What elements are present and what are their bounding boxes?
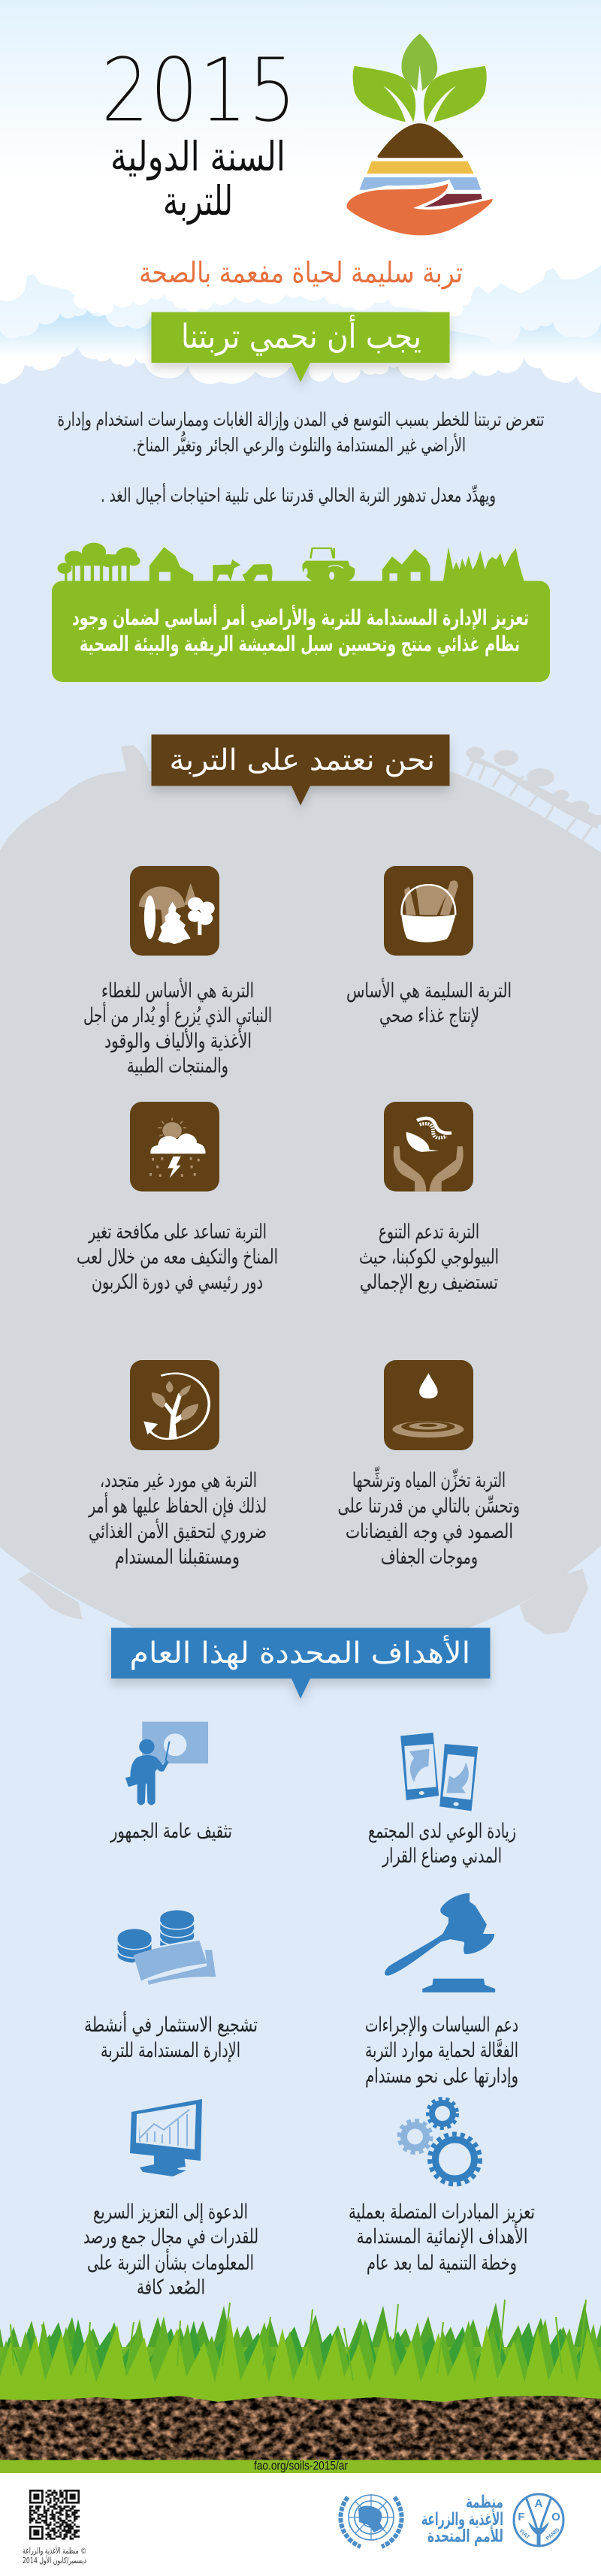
text: raise awareness: المدني وصناع القرار [382, 1845, 502, 1868]
icon: UN emblem [340, 2495, 402, 2547]
text: raise awareness: زيادة الوعي لدى المجتمع [368, 1820, 516, 1843]
icon: trees [130, 866, 219, 955]
text: strengthen initiatives [349, 2200, 535, 2275]
text: raise awareness [368, 1820, 516, 1868]
grass [0, 2300, 601, 2403]
text: support policies [365, 2013, 518, 2088]
text: strengthen initiatives: وخطة التنمية لما بعد عام [367, 2252, 517, 2275]
text: rapid capacity enhancement [83, 2200, 258, 2300]
soil layer [0, 2396, 601, 2460]
text: encourage investment: الإدارة المستدامة للتربة [101, 2039, 240, 2062]
text: soils store and filter water: وتحسِّن بالتالي من قدرتنا على [338, 1495, 520, 1518]
text: soils support biodiversity: البيولوجي لكوكبنا، حيث [359, 1245, 499, 1269]
background sky [0, 0, 601, 180]
icon: gavel [385, 1893, 495, 1992]
icon: water drop [384, 1360, 473, 1450]
title: international year of soils: السنة الدولية [110, 133, 285, 180]
icon: plant cycle [130, 1360, 219, 1450]
text: strengthen initiatives: تعزيز المبادرات المتصلة بعملية [349, 2200, 535, 2224]
icon: QR code [29, 2490, 80, 2538]
text: soils are the foundation for vegetation [83, 977, 272, 1078]
text: soils are the foundation for vegetation: والمنتجات الطبية [127, 1054, 228, 1078]
text: soils store and filter water [338, 1465, 520, 1569]
icon: food basket [384, 866, 473, 955]
panel: grey hill [0, 745, 601, 1664]
title: 2015: 2015 [101, 38, 297, 142]
icon: coins and banknotes [118, 1911, 216, 1985]
callout: sustainable management message [52, 581, 550, 682]
icon: monitor with chart [130, 2099, 202, 2176]
text: healthy soils for food: التربة السليمة هي الأساس [346, 977, 512, 1003]
text: copyright [23, 2545, 86, 2565]
text: FAO name [421, 2493, 503, 2546]
text: healthy soils for food [346, 977, 512, 1027]
text block: threats to soil: الأراضي غير المستدامة والتلوث والرعي الجائر وتغيُّر المناخ. [132, 430, 466, 457]
text: soils are a non-renewable resource: ومستقبلنا المستدام [115, 1546, 240, 1569]
title: international year of soils [110, 133, 285, 225]
heading: we depend on soil [152, 734, 449, 805]
text: encourage investment: تشجيع الاستثمار في أنشطة [84, 2010, 258, 2037]
text: soils are the foundation for vegetation: الأغذية والألياف والوقود [104, 1027, 252, 1053]
icon: FAO emblem: PANIS [545, 2527, 561, 2541]
heading: we depend on soil: نحن نعتمد على التربة [170, 744, 435, 777]
heading: we must protect our soil [152, 312, 449, 382]
icon: phones [400, 1733, 478, 1811]
footer white panel [0, 2473, 601, 2576]
icon: FAO emblem [514, 2494, 563, 2546]
text: encourage investment [84, 2010, 258, 2062]
text: soils store and filter water: التربة تخزِّن المياه وترشِّحها [352, 1465, 506, 1492]
heading: specific objectives: الأهداف المحددة لهذا العام [129, 1634, 470, 1670]
icon: weather [130, 1102, 219, 1191]
icon: FAO emblem: F [518, 2511, 525, 2523]
heading: we must protect our soil: يجب أن نحمي تربتنا [181, 315, 421, 356]
heading: specific objectives [111, 1628, 490, 1699]
text: soils help combat climate change [77, 1220, 278, 1294]
farm silhouette [57, 543, 524, 581]
text: FAO name: للأمم المتحدة [427, 2525, 503, 2546]
icon: gears [399, 2098, 480, 2184]
text: soils help combat climate change: التربة تساعد على مكافحة تغير [88, 1220, 267, 1244]
text: FAO name: منظمة [466, 2493, 503, 2512]
footer band with url: fao.org/soils-2015/ar [254, 2459, 348, 2472]
icon: teacher at board [125, 1722, 208, 1805]
footer band with url [0, 2459, 601, 2473]
text: support policies: دعم السياسات والإجراءات [365, 2013, 518, 2037]
text: copyright: © منظمة الأغذية والزراعة [23, 2545, 86, 2556]
text: soils are a non-renewable resource [88, 1469, 267, 1569]
text: soils support biodiversity: التربة تدعم التنوع [379, 1220, 479, 1244]
text: healthy soils for food: لإنتاج غذاء صحي [379, 1004, 479, 1027]
icon: biodiversity hands [384, 1102, 473, 1192]
text: soils are a non-renewable resource: التربة هي مورد غير متجدد، [100, 1469, 257, 1492]
text: soils are the foundation for vegetation: التربة هي الأساس للغطاء [101, 977, 254, 1003]
icon: FAO emblem: FIAT [518, 2529, 531, 2541]
text: soils support biodiversity [359, 1220, 499, 1294]
text: copyright: ديسمبر/كانون الأول 2014 [23, 2555, 86, 2565]
text: rapid capacity enhancement: المعلومات بشأن التربة على [87, 2248, 254, 2275]
text block: threats to soil [57, 409, 545, 507]
text: strengthen initiatives: الأهداف الإنمائية المستدامة [356, 2223, 527, 2249]
text: soils store and filter water: وموجات الجفاف [381, 1546, 478, 1569]
logo: plant, soil layers and hand [347, 34, 493, 235]
text: rapid capacity enhancement: الصُعد كافة [137, 2276, 205, 2300]
text: soils store and filter water: الصمود في وجه الفيضانات [346, 1520, 513, 1543]
text: soils are a non-renewable resource: لذلك فإن الحفاظ عليها هو أمر [88, 1492, 267, 1518]
text: rapid capacity enhancement: الدعوة إلى التعزيز السريع [93, 2200, 248, 2224]
text: soils are the foundation for vegetation: النباتي الذي يُزرع أو يُدار من أجل [83, 1001, 272, 1027]
text: FAO name: الأغذية والزراعة [421, 2508, 503, 2529]
icon: FAO emblem: A [535, 2497, 543, 2510]
text: soils are a non-renewable resource: ضروري لتحقيق الأمن الغذائي [89, 1518, 267, 1543]
text: support policies: وإدارتها على نحو مستدام [365, 2065, 518, 2088]
text: support policies: الفعَّالة لحماية موارد التربة [365, 2038, 518, 2062]
title: international year of soils: للتربة [163, 177, 233, 225]
text: soils help combat climate change: المناخ والتكيف معه من خلال لعب [77, 1245, 278, 1269]
text: soils help combat climate change: دور رئيسي في دورة الكربون [92, 1271, 263, 1294]
text: educate the public: تثقيف عامة الجمهور [110, 1820, 232, 1843]
subtitle: تربة سليمة لحياة مفعمة بالصحة [139, 256, 463, 290]
text: soils support biodiversity: تستضيف ربع الإجمالي [360, 1271, 498, 1294]
text: rapid capacity enhancement: للقدرات في مجال جمع ورصد [83, 2225, 258, 2249]
icon: FAO emblem: O [551, 2511, 560, 2523]
